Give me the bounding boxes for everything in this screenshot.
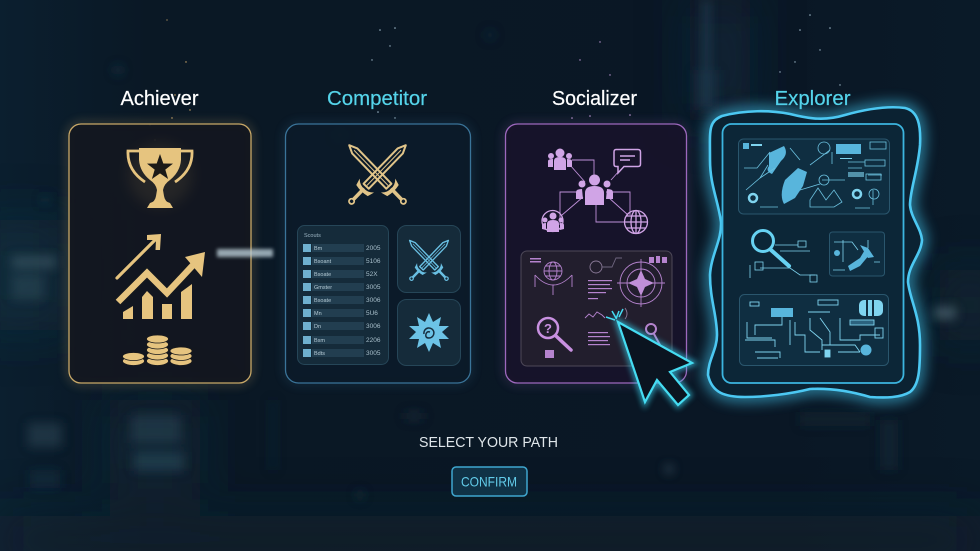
leaderboard table: Bm [314, 246, 323, 252]
bright blurred streak [217, 249, 273, 257]
dashboard panel [521, 251, 672, 366]
inner frame [722, 124, 904, 383]
icon: coin stacks [122, 335, 192, 366]
small map panel [830, 232, 884, 276]
panel: Achiever [69, 124, 273, 383]
prompt text: SELECT YOUR PATH [419, 434, 558, 451]
map panel top [738, 139, 890, 214]
panel: Socializer [506, 124, 692, 405]
icon: growth chart [117, 234, 205, 319]
panel: Competitor [286, 124, 470, 383]
outer wavy frame [708, 107, 922, 397]
heading: Socializer: Socializer [552, 88, 637, 110]
icon: circled group [542, 210, 564, 232]
leaderboard table: 3006 [366, 323, 381, 330]
icon: magnifier with question mark: ? [544, 321, 552, 336]
leaderboard table: Gmster [314, 285, 332, 291]
leaderboard table: Bsoate [314, 272, 331, 278]
leaderboard table: 5106 [366, 258, 381, 265]
leaderboard table: Mn [314, 311, 322, 317]
icon: trophy [128, 143, 192, 208]
circuit panel bottom [740, 294, 888, 366]
leaderboard table: Bsoant [314, 259, 332, 265]
tile: sun emblem [398, 300, 460, 366]
leaderboard table: 2206 [366, 337, 381, 344]
panel: Explorer [708, 107, 922, 397]
icon: crossed gold swords [342, 138, 413, 210]
leaderboard table: Bsoate [314, 298, 331, 304]
icon: globe [624, 210, 648, 234]
icon: top-left group [548, 148, 572, 170]
icon: cursor arrow [606, 309, 692, 405]
button: confirm: CONFIRM [461, 474, 517, 490]
leaderboard table: 52X [366, 271, 378, 278]
tile: crossed blue swords [398, 226, 460, 292]
heading: Competitor: Competitor [327, 88, 427, 110]
leaderboard table: Scouts [304, 233, 321, 239]
leaderboard table [298, 226, 388, 364]
leaderboard table: Bdts [314, 351, 325, 357]
heading: Achiever: Achiever [120, 88, 199, 110]
leaderboard table: 3006 [366, 297, 381, 304]
leaderboard table: Bsm [314, 338, 325, 344]
icon: chat bubble [614, 150, 640, 173]
heading: Explorer: Explorer [774, 88, 851, 110]
leaderboard table: 3005 [366, 350, 381, 357]
leaderboard table: 5U6 [366, 310, 378, 317]
floating particles [149, 14, 841, 141]
icon: magnifier [750, 230, 817, 282]
icon: central group [576, 174, 613, 205]
network diagram [542, 148, 648, 234]
leaderboard table: Dn [314, 324, 321, 330]
icon: magnifier with question mark [538, 318, 571, 350]
leaderboard table: 2005 [366, 245, 381, 252]
button: confirm [452, 467, 527, 496]
leaderboard table: 3005 [366, 284, 381, 291]
